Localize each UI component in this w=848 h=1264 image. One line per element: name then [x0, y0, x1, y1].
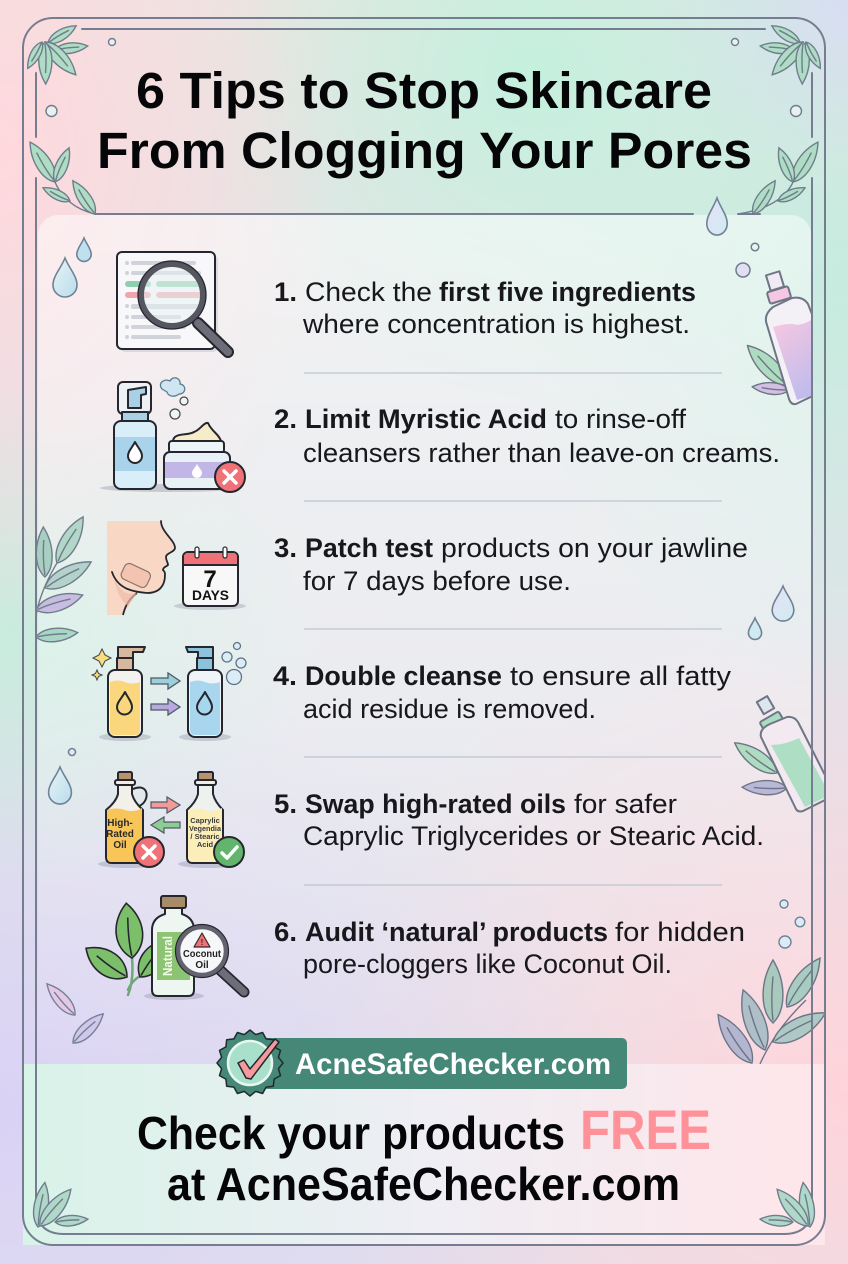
- title: From Clogging Your Pores: [97, 122, 752, 179]
- panel: tips background: [38, 215, 811, 1065]
- tip 5 text: Caprylic Triglycerides or Stearic Acid.: [303, 821, 764, 851]
- tip 6 text: for hidden: [615, 917, 745, 947]
- tip 4 text: acid residue is removed.: [303, 694, 596, 724]
- small circles top: [46, 38, 802, 116]
- divider: [304, 500, 722, 502]
- spray bottle pink: [746, 270, 811, 406]
- tip 1 text: 1.: [274, 277, 297, 307]
- tip 4 text: 4.: [273, 661, 297, 691]
- icon 4: double cleanse bottles: [92, 642, 246, 741]
- icon 5: oil swap bottles: Oil: [113, 840, 127, 851]
- icon 3: jawline patch and 7 days calendar: DAYS: [192, 588, 229, 603]
- decorative droplets right: [748, 586, 794, 639]
- icon 6: natural product audit: !: [201, 938, 203, 947]
- icon 1: ingredient list with magnifier: [117, 252, 228, 352]
- decorative leaves bottom left: [42, 979, 108, 1048]
- spray bottle green: [734, 695, 824, 812]
- icon 5: oil swap bottles: High-: [107, 818, 133, 829]
- tip 2 text: Limit Myristic Acid: [305, 404, 547, 434]
- call to action: [137, 1098, 711, 1210]
- tip 6 text: Audit ‘natural’ products: [305, 917, 608, 947]
- decorative bubbles top right: [736, 243, 759, 277]
- divider: [304, 628, 722, 630]
- icon 6: natural product audit: Coconut: [183, 949, 222, 960]
- icon 5: oil swap bottles: [98, 772, 244, 868]
- title: [97, 62, 752, 179]
- tip 6 text: 6.: [274, 917, 297, 947]
- tip 6 text: pore-cloggers like Coconut Oil.: [303, 949, 672, 979]
- icon 5: oil swap bottles: Acid: [197, 840, 214, 849]
- icon 6: natural product audit: Natural: [160, 936, 175, 976]
- decorative side leaves left: [37, 516, 92, 642]
- divider: [304, 756, 722, 758]
- tip 2 text: cleansers rather than leave-on creams.: [303, 438, 780, 468]
- icon 6: natural product audit: [79, 896, 244, 1000]
- title sprig left: [24, 138, 100, 217]
- tip 1 text: first five ingredients: [439, 277, 696, 307]
- tip 3 text: for 7 days before use.: [303, 566, 571, 596]
- icon 5: oil swap bottles: Rated: [106, 829, 134, 840]
- corner sprig bottom right: [760, 1181, 817, 1231]
- tip 5 text: Swap high-rated oils: [305, 789, 566, 819]
- icon 3: jawline patch and 7 days calendar: 7: [203, 566, 217, 593]
- divider: [304, 372, 722, 374]
- brand badge: [217, 1030, 627, 1096]
- corner sprig top left: [24, 21, 88, 84]
- tip 4 text: Double cleanse: [305, 661, 502, 691]
- tip 3 text: 3.: [274, 533, 297, 563]
- tip 2 text: 2.: [274, 404, 297, 434]
- tip 1 text: where concentration is highest.: [302, 309, 690, 339]
- corner sprig bottom left: [31, 1181, 88, 1231]
- brand badge: AcneSafeChecker.com: [295, 1048, 611, 1081]
- icon 6: natural product audit: Oil: [195, 960, 209, 971]
- icon 3: jawline patch and 7 days calendar: [107, 521, 246, 615]
- tip 3 text: products on your jawline: [441, 533, 748, 563]
- tip 5 text: for safer: [574, 789, 677, 819]
- call to action: at AcneSafeChecker.com: [167, 1158, 680, 1210]
- title: 6 Tips to Stop Skincare: [136, 62, 712, 119]
- icon 5: oil swap bottles: Vegendia: [189, 824, 222, 833]
- tip 5 text: 5.: [274, 789, 297, 819]
- leaf sprig lower right: [717, 957, 824, 1064]
- corner sprig top right: [760, 21, 824, 84]
- tip 3 text: Patch test: [305, 533, 433, 563]
- call to action: FREE: [580, 1098, 711, 1161]
- decorative droplets left: [49, 238, 91, 804]
- icon 5: oil swap bottles: / Stearic: [190, 832, 220, 841]
- decorative bubbles lower right: [779, 900, 805, 948]
- title sprig right: [738, 138, 824, 217]
- call to action: Check your products: [137, 1107, 565, 1159]
- icon 5: oil swap bottles: Caprylic: [190, 816, 220, 825]
- icon 2: pump bottle and cream jar: [100, 378, 245, 492]
- panel: footer band: [23, 1064, 825, 1245]
- divider: [304, 884, 722, 886]
- tip 1 text: Check the: [305, 277, 432, 307]
- tip 4 text: to ensure all fatty: [510, 661, 732, 691]
- tip 2 text: to rinse-off: [555, 404, 686, 434]
- droplet on title rule: [707, 198, 727, 235]
